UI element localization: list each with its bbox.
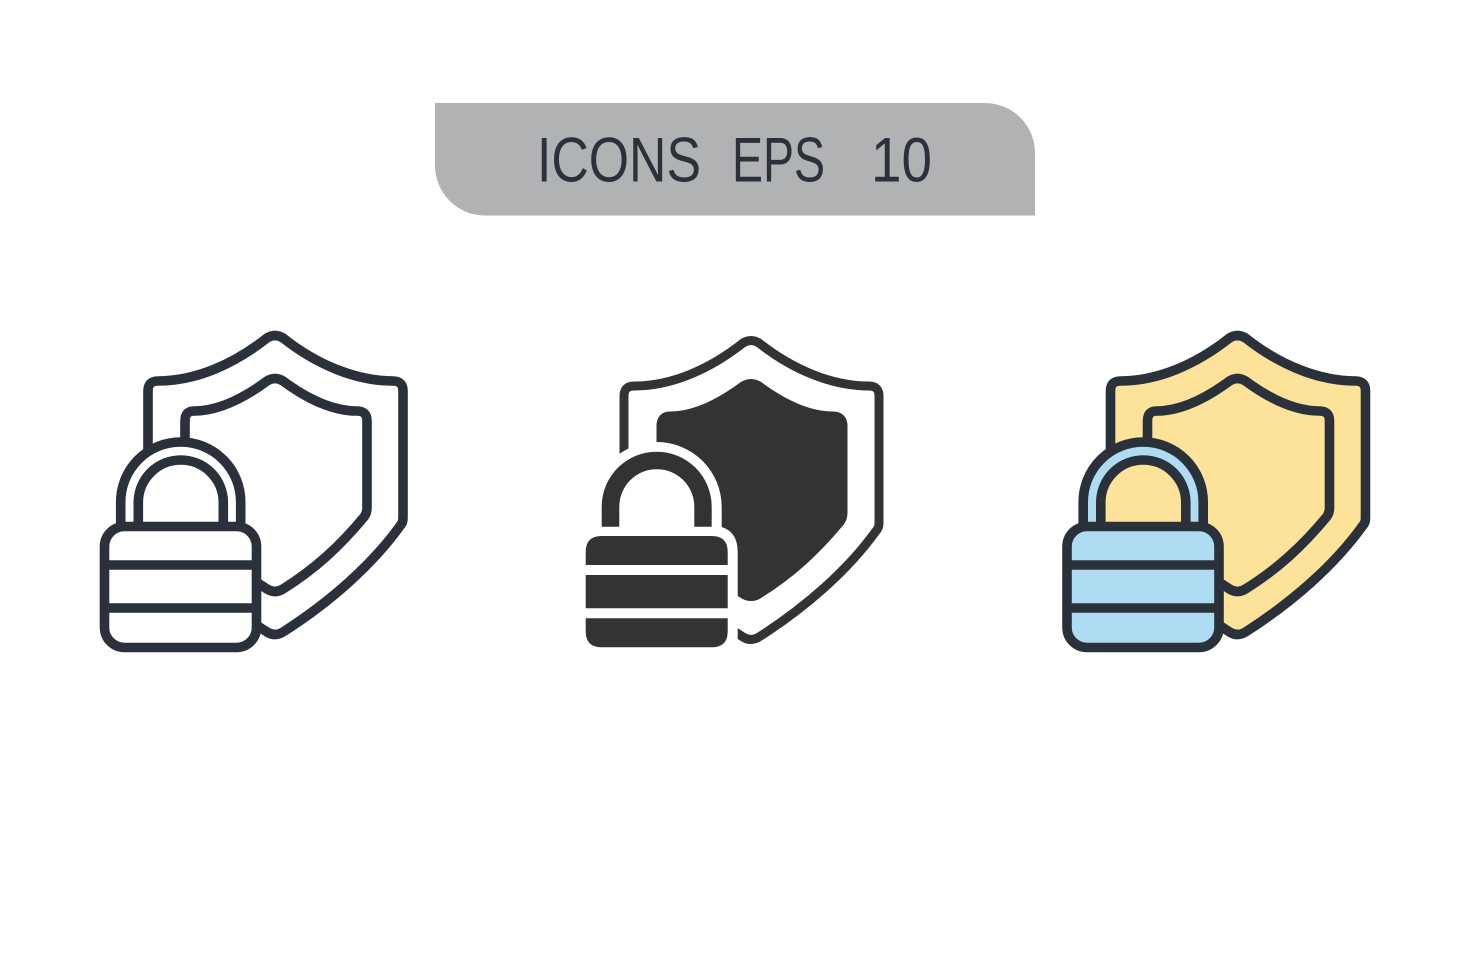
inner shield — [1148, 378, 1330, 592]
padlock body — [104, 526, 256, 648]
inner shield outline — [185, 378, 367, 592]
solid inner shield — [661, 384, 843, 596]
icon: solid shield and padlock — [575, 340, 879, 662]
padlock shackle inner — [138, 460, 223, 528]
icon: coloured shield and padlock — [1067, 336, 1366, 648]
banner: icons eps 10: ICONS — [537, 126, 701, 196]
icon: outline shield and padlock — [104, 336, 403, 648]
banner: icons eps 10 — [435, 103, 1035, 216]
padlock shackle inner — [1101, 460, 1186, 528]
padlock stripes — [1068, 565, 1218, 608]
white halo around padlock — [575, 442, 738, 662]
outer shield outline — [148, 336, 403, 634]
padlock body — [1067, 526, 1219, 648]
banner: icons eps 10: 10 — [871, 126, 932, 196]
banner: icons eps 10: EPS — [732, 126, 825, 196]
padlock shackle — [1083, 442, 1203, 528]
padlock body — [586, 536, 728, 647]
padlock stripes — [105, 565, 256, 608]
outer shield — [1110, 336, 1366, 634]
padlock shackle — [602, 452, 712, 527]
padlock shackle — [121, 442, 241, 528]
outer shield outline — [624, 340, 879, 640]
